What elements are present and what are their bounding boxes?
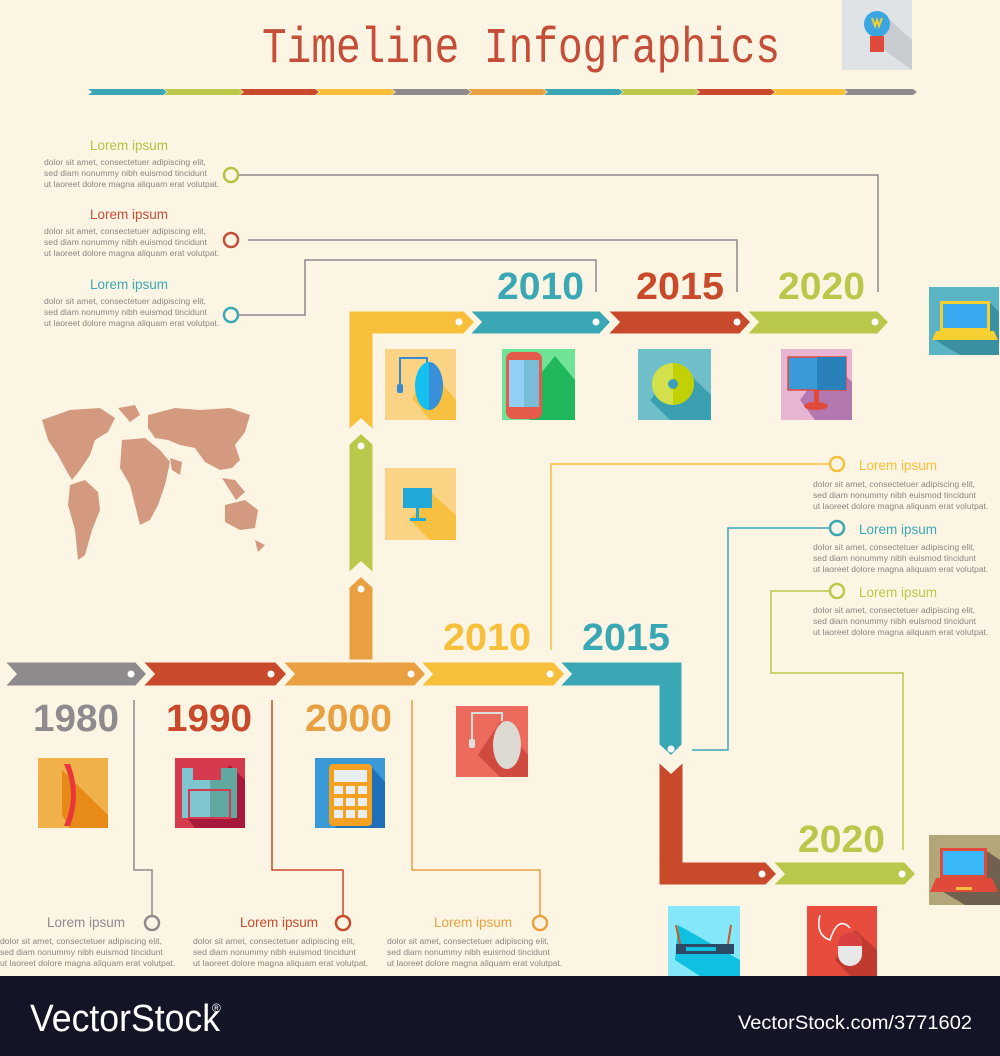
text block: right 1: ut laoreet dolore magna aliquam erat volutpat. [813, 501, 988, 511]
text block: right 1 [813, 457, 988, 511]
text block: top-left 1: Lorem ipsum [90, 138, 168, 153]
text block: bottom 2: dolor sit amet, consectetuer adipiscing elit, [193, 936, 355, 946]
text block: bottom 1 [0, 915, 175, 968]
icon: calculator [315, 758, 385, 828]
top timeline [348, 310, 890, 661]
text block: bottom 2: Lorem ipsum [240, 915, 318, 930]
text block: right 3: dolor sit amet, consectetuer adipiscing elit, [813, 605, 975, 615]
year labels bottom: 2010 [443, 617, 531, 659]
icon: monitor [781, 349, 852, 420]
text block: right 3: sed diam nonummy nibh euismod tincidunt [813, 616, 977, 626]
text block: right 2: sed diam nonummy nibh euismod tincidunt [813, 553, 977, 563]
year labels bottom: 1980 [33, 698, 119, 740]
icon: cd [638, 349, 711, 420]
icon: mouse red [456, 706, 528, 777]
icon: mouse white [807, 906, 877, 976]
text block: top-left 2: ut laoreet dolore magna aliquam erat volutpat. [44, 248, 219, 258]
year labels top: 2015 [636, 266, 724, 308]
year labels bottom: 2000 [305, 698, 392, 740]
text block: right 2: Lorem ipsum [859, 522, 937, 537]
text block: top-left 1: sed diam nonummy nibh euismod tincidunt [44, 168, 208, 178]
text block: top-left 1 [44, 138, 238, 189]
text block: bottom 3: sed diam nonummy nibh euismod tincidunt [387, 947, 551, 957]
connector lines right [551, 464, 903, 850]
text block: bottom 2 [193, 915, 368, 968]
footer: VectorStock.com/3771602 [738, 1013, 972, 1034]
connector lines top [239, 175, 878, 315]
text block: bottom 3: dolor sit amet, consectetuer adipiscing elit, [387, 936, 549, 946]
footer: ® [212, 1001, 221, 1015]
text block: bottom 3 [387, 915, 562, 968]
text block: top-left 3: sed diam nonummy nibh euismod tincidunt [44, 307, 208, 317]
icon: phone [38, 758, 108, 828]
year labels bottom: 1990 [166, 698, 252, 740]
year labels top: 2010 [497, 266, 584, 308]
connector lines bottom [134, 700, 540, 915]
year labels bottom: 2020 [798, 819, 885, 861]
year labels bottom [33, 617, 885, 861]
text block: top-left 3: ut laoreet dolore magna aliquam erat volutpat. [44, 318, 219, 328]
text block: right 2 [813, 521, 988, 574]
year labels bottom: 2015 [582, 617, 670, 659]
text block: right 2: dolor sit amet, consectetuer adipiscing elit, [813, 542, 975, 552]
year labels top: 2020 [778, 266, 865, 308]
icon: router [668, 906, 740, 976]
text block: right 3: Lorem ipsum [859, 585, 937, 600]
text block: top-left 2: Lorem ipsum [90, 207, 168, 222]
text block: top-left 3: Lorem ipsum [90, 277, 168, 292]
icon: laptop top right [929, 287, 999, 355]
text block: bottom 1: ut laoreet dolore magna aliquam erat volutpat. [0, 958, 175, 968]
footer [0, 976, 1000, 1056]
footer: VectorStock [30, 998, 221, 1040]
text block: bottom 3: Lorem ipsum [434, 915, 512, 930]
icon: small monitor [385, 468, 456, 540]
decorative stripe [88, 89, 917, 95]
icon: smartphone [502, 349, 575, 420]
text block: right 3: ut laoreet dolore magna aliquam erat volutpat. [813, 627, 988, 637]
text block: right 1: Lorem ipsum [859, 458, 937, 473]
text block: right 2: ut laoreet dolore magna aliquam erat volutpat. [813, 564, 988, 574]
icon: laptop bottom right [929, 835, 1000, 905]
text block: top-left 2: sed diam nonummy nibh euismod tincidunt [44, 237, 208, 247]
text block: top-left 2 [44, 207, 238, 258]
text block: top-left 3 [44, 277, 238, 328]
text block: top-left 2: dolor sit amet, consectetuer adipiscing elit, [44, 226, 206, 236]
text block: bottom 1: sed diam nonummy nibh euismod tincidunt [0, 947, 164, 957]
text block: top-left 3: dolor sit amet, consectetuer adipiscing elit, [44, 296, 206, 306]
world map [42, 405, 265, 560]
text block: bottom 3: ut laoreet dolore magna aliquam erat volutpat. [387, 958, 562, 968]
text block: right 3 [813, 584, 988, 637]
year labels top [497, 266, 865, 308]
text block: top-left 1: ut laoreet dolore magna aliquam erat volutpat. [44, 179, 219, 189]
title: Timeline Infographics [262, 21, 780, 78]
icon: lightbulb [842, 0, 912, 70]
icon: floppy [175, 758, 245, 828]
text block: bottom 2: sed diam nonummy nibh euismod tincidunt [193, 947, 357, 957]
text block: right 1: dolor sit amet, consectetuer adipiscing elit, [813, 479, 975, 489]
bottom timeline [3, 661, 917, 886]
text block: bottom 1: dolor sit amet, consectetuer adipiscing elit, [0, 936, 162, 946]
text block: top-left 1: dolor sit amet, consectetuer adipiscing elit, [44, 157, 206, 167]
text block: bottom 1: Lorem ipsum [47, 915, 125, 930]
icon: mouse blue [385, 349, 456, 420]
text block: right 1: sed diam nonummy nibh euismod tincidunt [813, 490, 977, 500]
text block: bottom 2: ut laoreet dolore magna aliquam erat volutpat. [193, 958, 368, 968]
